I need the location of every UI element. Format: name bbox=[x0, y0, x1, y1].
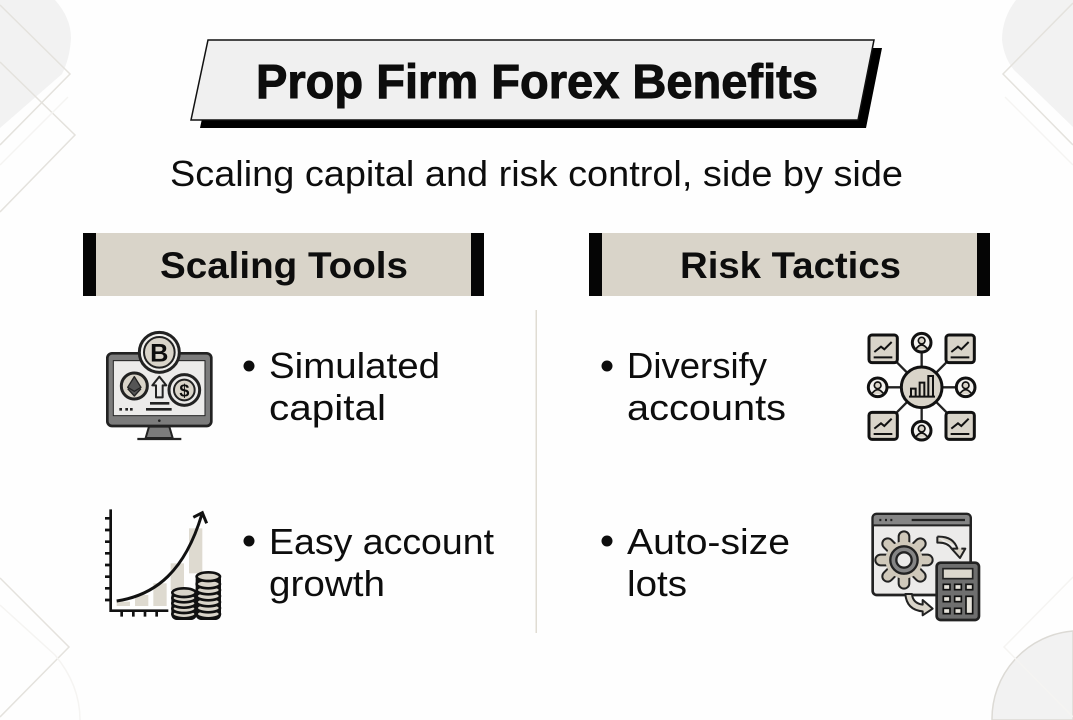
bullet: Simulated capital bbox=[244, 345, 440, 428]
panel heading: Scaling Tools bbox=[83, 233, 484, 296]
bullet: Diversify accounts: accounts bbox=[627, 387, 786, 428]
icon: gear and calculator window bbox=[873, 514, 979, 620]
icon: crypto monitor: B bbox=[150, 339, 168, 367]
subtitle: Scaling capital and risk control, side by side bbox=[170, 153, 903, 194]
panel heading: Risk Tactics bbox=[589, 233, 990, 296]
panel heading: Risk Tactics: Risk Tactics bbox=[680, 245, 901, 286]
bullet: Easy account growth: Easy account bbox=[269, 521, 494, 562]
bullet: Diversify accounts: Diversify bbox=[627, 345, 767, 386]
bullet: Easy account growth bbox=[244, 521, 494, 604]
bullet: Simulated capital: capital bbox=[269, 387, 386, 428]
icon: crypto monitor bbox=[107, 332, 211, 439]
bullet: Auto-size lots: lots bbox=[627, 563, 687, 604]
title banner bbox=[191, 40, 882, 128]
bullet: Auto-size lots: Auto-size bbox=[627, 521, 790, 562]
bullet: Auto-size lots bbox=[602, 521, 790, 604]
bullet: Simulated capital: Simulated bbox=[269, 345, 440, 386]
column divider bbox=[536, 310, 537, 633]
title: Prop Firm Forex Benefits bbox=[256, 56, 818, 109]
panel heading: Scaling Tools: Scaling Tools bbox=[160, 245, 408, 286]
icon: diversified accounts network bbox=[868, 333, 975, 440]
icon: growth chart with coins bbox=[105, 509, 220, 619]
icon: crypto monitor: $ bbox=[179, 380, 189, 400]
bullet: Easy account growth: growth bbox=[269, 563, 385, 604]
bullet: Diversify accounts bbox=[602, 345, 786, 428]
